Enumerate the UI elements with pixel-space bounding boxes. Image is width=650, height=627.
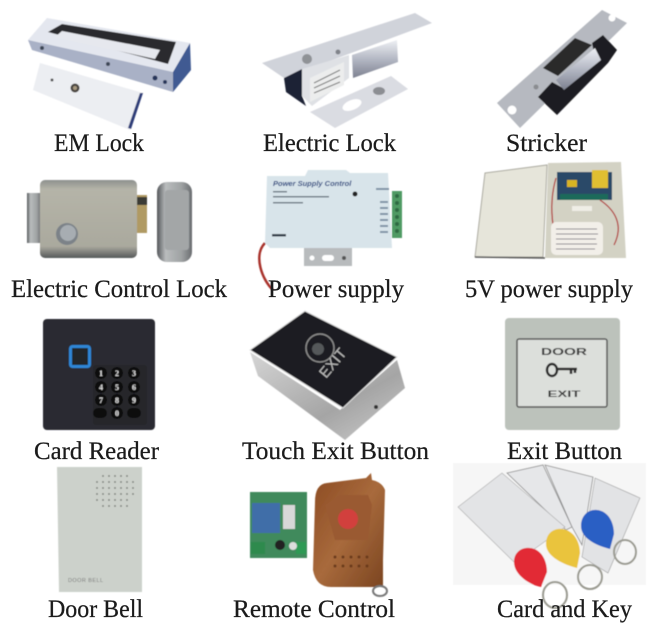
icon: power supply control unit [259, 170, 402, 290]
label: Card and Key: Card and Key [497, 596, 632, 623]
icon: rim lock [27, 180, 192, 262]
panel: EM Lock [28, 18, 191, 157]
label: Exit Button: Exit Button [507, 438, 622, 465]
icon: card reader keypad: 6 [132, 383, 136, 392]
panel: Electric Control Lock [11, 180, 227, 303]
panel: Power supply [259, 170, 404, 303]
panel: Remote Control [233, 473, 395, 623]
icon: card reader keypad: 8 [115, 396, 119, 405]
panel: Touch Exit Button [242, 311, 429, 465]
label: Stricker: Stricker [506, 130, 588, 157]
icon: power supply control unit: Power Supply Control [273, 179, 352, 188]
icon: door stricker [497, 10, 627, 128]
panel: Door Bell [48, 467, 143, 623]
icon: card reader keypad: 4 [99, 383, 103, 392]
icon: card reader keypad: 2 [115, 369, 119, 378]
label: Remote Control: Remote Control [233, 596, 395, 623]
icon: electric lock [262, 13, 432, 128]
panel: 5V power supply [465, 162, 633, 303]
icon: receiver board and remote fob [250, 473, 387, 596]
label: Touch Exit Button: Touch Exit Button [242, 438, 429, 465]
icon: card reader keypad: 5 [115, 383, 119, 392]
icon: card reader keypad: 9 [132, 396, 136, 405]
label: 5V power supply: 5V power supply [465, 276, 633, 303]
icon: card reader keypad: 1 [99, 369, 103, 378]
label: Electric Lock: Electric Lock [263, 130, 396, 157]
icon: touch exit button [250, 311, 405, 440]
panel: Exit Button [505, 318, 622, 465]
icon: EM lock [28, 18, 191, 130]
icon: door bell [57, 467, 142, 592]
icon: power supply box [475, 162, 626, 258]
label: Power supply: Power supply [268, 276, 404, 303]
label: Door Bell: Door Bell [48, 596, 143, 623]
icon: proximity cards and key fobs [453, 463, 646, 608]
icon: door exit button: DOOR [541, 347, 588, 358]
panel: Card Reader [34, 319, 160, 465]
icon: card reader keypad: 3 [132, 369, 136, 378]
icon: door exit button [505, 318, 620, 430]
icon: door exit button: EXIT [548, 389, 581, 400]
panel: Stricker [497, 10, 627, 157]
panel: Electric Lock [262, 13, 432, 157]
icon: card reader keypad [43, 319, 155, 430]
icon: card reader keypad: 0 [115, 409, 119, 418]
label: Card Reader: Card Reader [34, 438, 160, 465]
icon: card reader keypad: 7 [99, 396, 103, 405]
icon: touch exit button: EXIT [316, 345, 350, 382]
panel: Card and Key [453, 463, 646, 623]
label: EM Lock: EM Lock [54, 130, 144, 157]
label: Electric Control Lock: Electric Control Lock [11, 276, 227, 303]
icon: door bell: DOOR BELL [68, 578, 103, 584]
